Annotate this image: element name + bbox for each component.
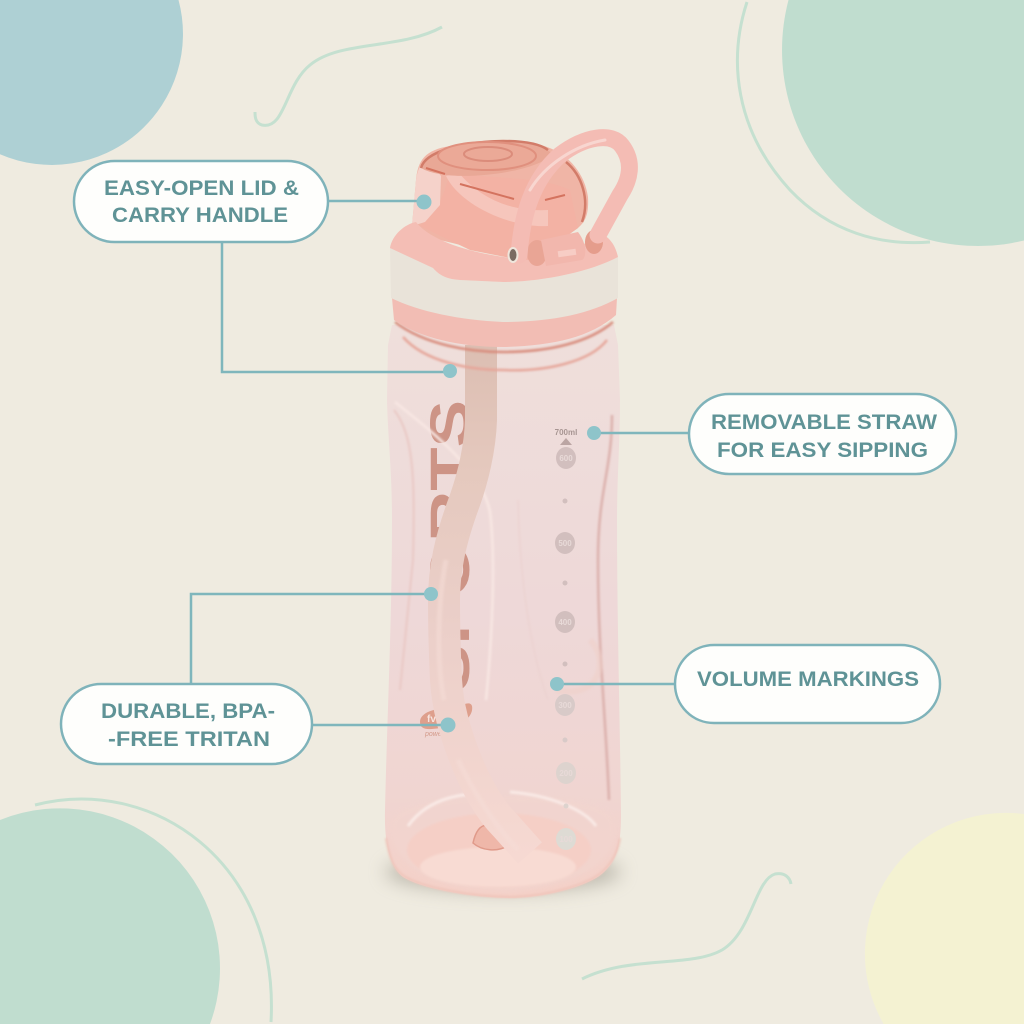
volume markings: 400 xyxy=(558,618,572,627)
callout: volume markings: VOLUME MARKINGS xyxy=(697,668,919,691)
lower pink ring xyxy=(392,298,617,347)
callout connectors xyxy=(191,201,689,725)
callout: easy-open lid and carry handle: EASY-OPEN LID & xyxy=(104,177,299,200)
side contour lines xyxy=(394,410,612,800)
callout: easy-open lid and carry handle xyxy=(74,161,328,242)
callout: removable straw xyxy=(689,394,956,474)
bottle xyxy=(385,138,629,898)
callout: removable straw: REMOVABLE STRAW xyxy=(711,411,937,434)
volume markings: 600 xyxy=(559,454,573,463)
bottle shadow xyxy=(385,852,621,892)
callout: volume markings xyxy=(675,645,940,723)
neck ring xyxy=(395,322,613,370)
lid dome xyxy=(412,140,588,262)
carry handle xyxy=(519,138,629,255)
brand badge: power xyxy=(424,731,445,738)
volume markings: 300 xyxy=(558,701,572,710)
volume markings: 100 xyxy=(559,835,573,844)
callout: removable straw: FOR EASY SIPPING xyxy=(717,439,928,462)
brand lettering: SPORTS xyxy=(418,400,481,692)
straw highlight xyxy=(439,560,518,850)
callout: easy-open lid and carry handle: CARRY HANDLE xyxy=(112,204,288,227)
callout: durable tritan: -FREE TRITAN xyxy=(108,728,270,751)
volume markings xyxy=(555,428,577,850)
brand badge xyxy=(420,703,472,738)
pink collar xyxy=(390,222,618,282)
straw xyxy=(444,345,530,853)
hinge xyxy=(527,230,603,266)
bottle base xyxy=(386,792,620,897)
volume markings: 700ml xyxy=(555,428,577,437)
volume markings: 200 xyxy=(559,769,573,778)
callout: durable tritan xyxy=(61,684,312,764)
callout dots xyxy=(416,194,601,732)
volume markings: 500 xyxy=(558,539,572,548)
highlight over lettering xyxy=(395,402,493,700)
bottle body xyxy=(385,325,621,898)
callout: durable tritan: DURABLE, BPA- xyxy=(101,700,275,723)
brand badge: fvt xyxy=(427,714,440,725)
handle pin xyxy=(508,248,518,262)
white band xyxy=(390,247,618,322)
